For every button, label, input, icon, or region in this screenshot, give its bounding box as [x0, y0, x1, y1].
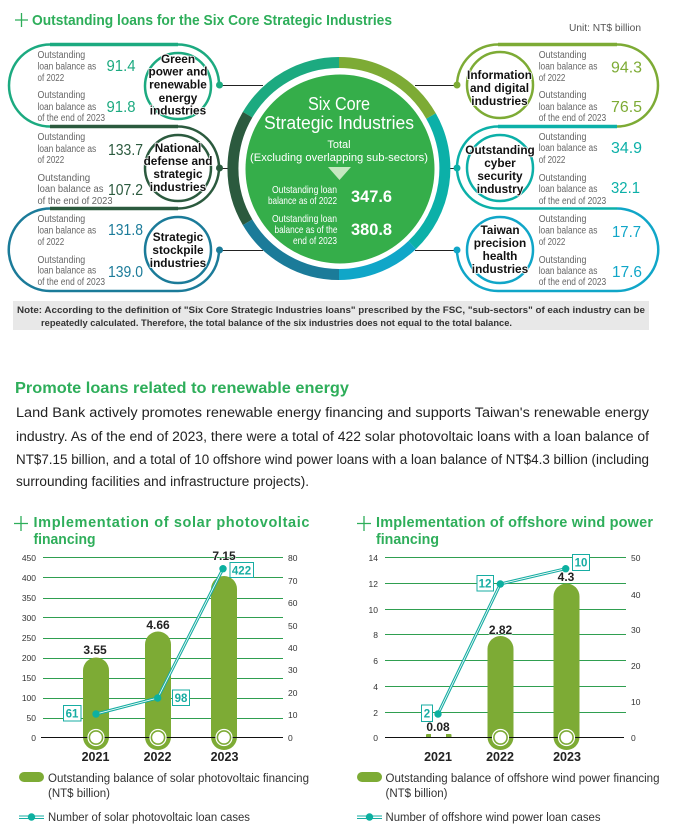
chart: solar photovoltaic: 98	[175, 693, 188, 705]
panel: strategic stockpile: loan balance as	[38, 226, 96, 236]
legend: wind: Outstanding balance of offshore wind power financing	[386, 773, 660, 785]
chart: offshore wind power: 4.3	[558, 570, 575, 584]
heading: wind chart: Implementation of offshore wind power	[376, 515, 653, 531]
panel: information and digital: industries	[471, 94, 528, 108]
body text: surrounding facilities and infrastructure projects).	[16, 474, 309, 489]
chart: solar photovoltaic: 2022	[144, 750, 171, 764]
panel: Taiwan precision health: health	[483, 249, 517, 263]
panel: green power and renewable energy: Green	[161, 52, 195, 66]
chart: solar photovoltaic: 70	[288, 576, 298, 586]
panel: green power and renewable energy: Outstanding	[38, 90, 85, 101]
heading: solar chart	[14, 515, 310, 548]
chart: offshore wind power: 8	[373, 630, 378, 640]
panel: national defense and strategic: of 2022	[38, 155, 65, 166]
central circle: total: Strategic Industries	[264, 113, 414, 133]
note box: repeatedly calculated. Therefore, the total balance of the six industries does not equal to the total balance.	[41, 318, 512, 329]
chart: solar photovoltaic: 30	[288, 665, 298, 675]
panel: information and digital: Outstanding	[539, 50, 586, 61]
panel: cyber security: of the end of 2023	[539, 196, 607, 207]
chart: solar photovoltaic: 3.55	[83, 643, 107, 657]
panel: strategic stockpile: of 2022	[38, 237, 65, 248]
chart: solar photovoltaic: 300	[22, 613, 36, 623]
body text: Land Bank actively promotes renewable energy financing and supports Taiwan's renewable energy	[16, 405, 649, 420]
central circle: total: Total	[327, 139, 351, 151]
connector lines	[220, 86, 457, 250]
line: wind loan cases	[434, 565, 569, 718]
heading: solar chart: Implementation of solar photovoltaic	[34, 515, 310, 531]
central circle: total: (Excluding overlapping sub-sectors)	[250, 152, 428, 164]
panel: green power and renewable energy: industries	[150, 104, 207, 118]
panel: Taiwan precision health: of 2022	[539, 237, 566, 248]
panel: green power and renewable energy: renewable	[149, 78, 207, 92]
chart: solar photovoltaic: 61	[66, 708, 79, 720]
legend: wind: Number of offshore wind power loan cases	[386, 812, 601, 824]
panel: Taiwan precision health: industries	[472, 262, 529, 276]
panel: green power and renewable energy: of 2022	[38, 73, 65, 84]
panel: cyber security: Outstanding	[539, 173, 586, 184]
panel: cyber security: 32.1	[611, 180, 640, 197]
chart: solar photovoltaic: 200	[22, 653, 36, 663]
chart: offshore wind power: 6	[373, 656, 378, 666]
panel: Taiwan precision health: 17.7	[612, 224, 641, 241]
panel: information and digital: 76.5	[611, 99, 642, 116]
panel: information and digital	[454, 44, 658, 126]
chart: solar photovoltaic: 4.66	[146, 618, 170, 632]
chart: solar photovoltaic: 250	[22, 633, 36, 643]
chart: offshore wind power: 30	[631, 625, 641, 635]
line: solar loan cases	[92, 565, 227, 718]
legend: wind: (NT$ billion)	[386, 788, 448, 800]
chart: offshore wind power: 2	[373, 708, 378, 718]
chart: offshore wind power	[369, 553, 641, 764]
chart: solar photovoltaic: 50	[288, 621, 298, 631]
central ring	[233, 62, 445, 275]
unit label: Unit: NT$ billion	[569, 23, 641, 34]
chart: solar photovoltaic: 100	[22, 693, 36, 703]
chart: offshore wind power: 2.82	[489, 623, 513, 637]
panel: strategic stockpile: Outstanding	[38, 255, 85, 266]
panel: national defense and strategic: loan balance as	[38, 144, 96, 155]
panel: strategic stockpile: of the end of 2023	[38, 277, 105, 288]
panel: Taiwan precision health	[454, 208, 658, 291]
panel: cyber security: loan balance as	[539, 184, 597, 195]
heading: solar chart: financing	[34, 532, 96, 548]
panel: Taiwan precision health: loan balance as	[539, 226, 597, 236]
central circle: total: Outstanding loan	[272, 213, 337, 225]
panel: cyber security	[454, 126, 642, 208]
panel: national defense and strategic: National	[155, 141, 201, 155]
chart: offshore wind power: 0	[373, 733, 378, 743]
chart: offshore wind power: 2023	[553, 750, 581, 764]
heading: wind chart: financing	[376, 532, 439, 548]
panel: information and digital: and digital	[470, 81, 529, 95]
note box	[13, 301, 649, 330]
chart: offshore wind power: 2	[424, 708, 430, 720]
chart: solar photovoltaic: 7.15	[212, 549, 236, 563]
panel: national defense and strategic: Outstanding	[38, 132, 85, 143]
central circle: total: balance as of the	[274, 224, 338, 236]
panel: information and digital: Information	[467, 68, 532, 82]
chart: offshore wind power: 0.08	[426, 720, 450, 734]
bars: solar balance	[83, 576, 237, 750]
panel: green power and renewable energy: power and	[148, 64, 208, 78]
chart: solar photovoltaic: 350	[22, 593, 36, 603]
chart: solar photovoltaic: 422	[232, 566, 251, 578]
chart: solar photovoltaic: 20	[288, 688, 298, 698]
panel: green power and renewable energy: loan balance as	[38, 102, 96, 113]
legend: solar	[19, 772, 309, 824]
panel: national defense and strategic: 133.7	[108, 142, 143, 159]
panel: national defense and strategic: defense and	[144, 154, 212, 168]
chart: solar photovoltaic: 10	[288, 710, 298, 720]
chart: offshore wind power: 0	[631, 733, 636, 743]
central circle: total: Outstanding loan	[272, 184, 337, 196]
panel: Taiwan precision health: loan balance as	[539, 266, 597, 277]
panel: Taiwan precision health: precision	[474, 236, 526, 250]
heading: wind chart	[357, 515, 653, 548]
central circle: total: Six Core	[308, 94, 370, 114]
panel: green power and renewable energy: Outstanding	[38, 50, 85, 61]
chart: solar photovoltaic: 2021	[82, 750, 109, 764]
panel: green power and renewable energy: loan balance as	[38, 62, 96, 72]
panel: cyber security: Outstanding	[465, 143, 535, 157]
panel: information and digital: of 2022	[539, 73, 566, 84]
panel: national defense and strategic	[38, 126, 223, 208]
panel: strategic stockpile: industries	[150, 256, 207, 270]
chart: offshore wind power: 2021	[424, 750, 452, 764]
panel: Taiwan precision health: 17.6	[612, 264, 642, 281]
panel: national defense and strategic: 107.2	[108, 182, 143, 199]
panel: information and digital: loan balance as	[539, 62, 597, 72]
heading: promote loans: Promote loans related to renewable energy	[15, 380, 349, 397]
panel: information and digital: of the end of 2023	[539, 113, 607, 124]
central circle: total	[246, 74, 434, 264]
chart: solar photovoltaic: 40	[288, 643, 298, 653]
panel: cyber security: of 2022	[539, 155, 566, 166]
panel: cyber security: industry	[477, 182, 524, 196]
chart: solar photovoltaic: 450	[22, 553, 36, 563]
legend: solar: (NT$ billion)	[48, 788, 110, 800]
panel: Taiwan precision health: of the end of 2023	[539, 277, 607, 288]
panel: national defense and strategic: Outstanding	[38, 173, 90, 184]
chart: offshore wind power: 20	[631, 661, 641, 671]
legend: solar: Number of solar photovoltaic loan cases	[48, 812, 250, 824]
panel: strategic stockpile: stockpile	[152, 243, 204, 257]
chart: solar photovoltaic	[22, 549, 298, 764]
chart: solar photovoltaic: 0	[31, 733, 36, 743]
chart: solar photovoltaic: 0	[288, 733, 293, 743]
chart: offshore wind power: 12	[479, 578, 491, 590]
chart: offshore wind power: 10	[575, 558, 587, 570]
chart: solar photovoltaic: 50	[27, 713, 36, 723]
chart: solar photovoltaic: 150	[22, 673, 36, 683]
legend: solar: Outstanding balance of solar photovoltaic financing	[48, 773, 309, 785]
panel: Taiwan precision health: Outstanding	[539, 214, 586, 225]
panel: cyber security: 34.9	[611, 140, 642, 157]
panel: information and digital: 94.3	[611, 60, 642, 76]
body text	[16, 405, 649, 489]
panel: national defense and strategic: loan balance as	[38, 184, 104, 195]
panel: strategic stockpile: Strategic	[153, 230, 204, 244]
panel: strategic stockpile: 139.0	[108, 264, 143, 281]
chart: solar photovoltaic: 60	[288, 598, 298, 608]
panel: green power and renewable energy: of the end of 2023	[38, 113, 105, 124]
bars: wind balance	[426, 584, 580, 750]
body text: industry. As of the end of 2023, there were a total of 422 solar photovoltaic loans with a loan balance of	[16, 429, 649, 444]
chart: offshore wind power: 50	[631, 553, 641, 563]
panel: green power and renewable energy	[9, 44, 223, 126]
note box: Note: According to the definition of "Six Core Strategic Industries loans" prescribed by the FSC, "sub-sectors" of each industry can be	[17, 305, 645, 316]
chart: offshore wind power: 10	[631, 697, 641, 707]
panel: Taiwan precision health: Taiwan	[480, 223, 520, 237]
panel: cyber security: security	[477, 169, 523, 183]
panel: national defense and strategic: industries	[150, 180, 207, 194]
panel: information and digital: Outstanding	[539, 90, 586, 101]
chart: solar photovoltaic: 2023	[211, 750, 238, 764]
central circle: total: 380.8	[351, 221, 392, 239]
chart: offshore wind power: 12	[369, 579, 378, 589]
panel: green power and renewable energy: energy	[159, 91, 198, 105]
chart: offshore wind power: 4	[373, 682, 378, 692]
panel: strategic stockpile: loan balance as	[38, 266, 96, 276]
panel: cyber security: cyber	[484, 156, 516, 170]
panel: strategic stockpile	[9, 208, 223, 291]
chart: offshore wind power: 2022	[486, 750, 514, 764]
chart: offshore wind power: 40	[631, 590, 641, 600]
chart: offshore wind power: 10	[369, 605, 378, 615]
chart: solar photovoltaic: 400	[22, 573, 36, 583]
chart: solar photovoltaic: 80	[288, 553, 298, 563]
title: outstanding loans: Outstanding loans for the Six Core Strategic Industries	[32, 12, 392, 29]
chart: offshore wind power: 14	[369, 553, 378, 563]
panel: national defense and strategic: of the end of 2023	[38, 196, 113, 207]
central circle: total: balance as of 2022	[268, 195, 337, 207]
panel: cyber security: loan balance as	[539, 143, 597, 154]
panel: strategic stockpile: Outstanding	[38, 214, 85, 225]
panel: green power and renewable energy: 91.4	[106, 58, 136, 75]
panel: cyber security: Outstanding	[539, 132, 586, 143]
body text: NT$7.15 billion, and a total of 10 offshore wind power loans with a loan balance of NT$4.3 billion (including	[16, 452, 649, 467]
panel: national defense and strategic: strategic	[153, 167, 203, 181]
central circle: total: end of 2023	[293, 235, 337, 247]
panel: green power and renewable energy: 91.8	[106, 99, 136, 116]
panel: information and digital: loan balance as	[539, 102, 597, 113]
central circle: total: 347.6	[351, 188, 392, 206]
panel: strategic stockpile: 131.8	[108, 222, 143, 239]
panel: Taiwan precision health: Outstanding	[539, 255, 586, 266]
legend: wind	[357, 772, 660, 824]
